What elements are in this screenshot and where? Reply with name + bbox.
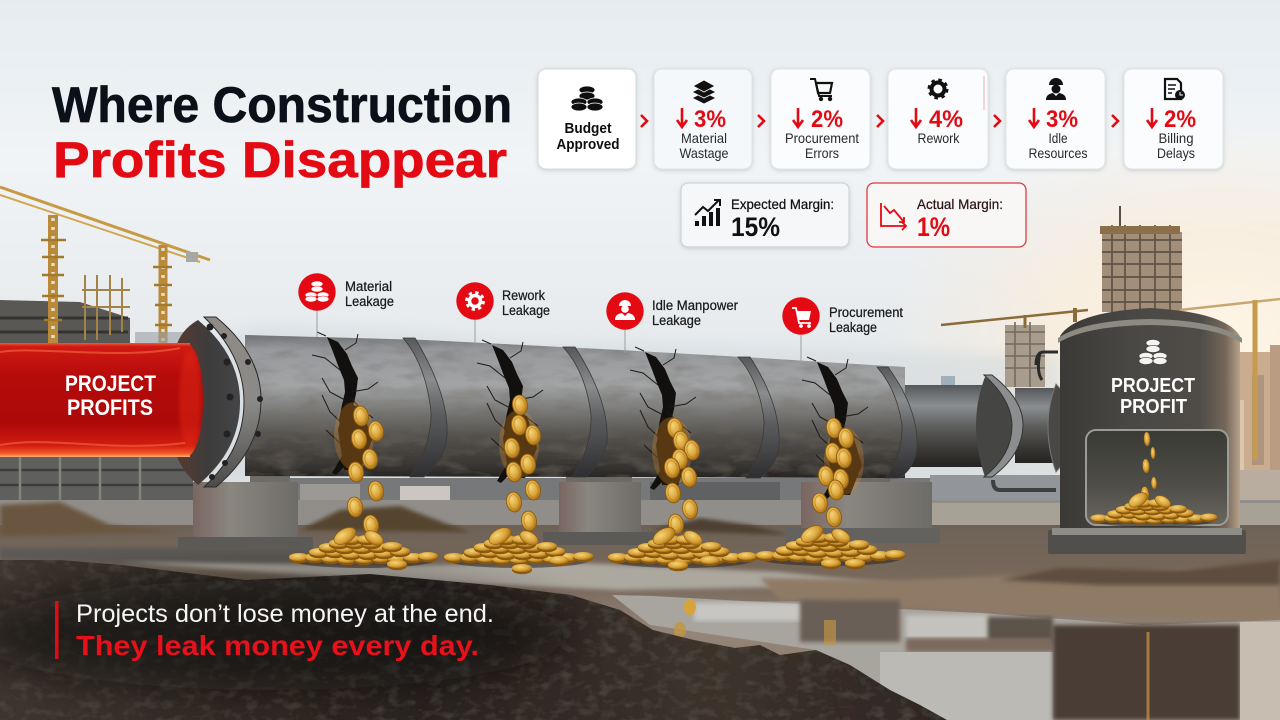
label: project profits: PROJECT: [65, 371, 156, 396]
callout: material leakage: Leakage: [345, 294, 394, 309]
card: idle resources: 3%: [1046, 106, 1078, 133]
foreground soil mound: [0, 560, 947, 720]
pipe bands: [403, 338, 917, 478]
card: billing delays: [1124, 69, 1223, 169]
closing message: They leak money every day.: [76, 630, 479, 661]
margin card: actual: [867, 183, 1026, 247]
closing message: Projects don’t lose money at the end.: [76, 600, 494, 628]
background: site structures behind pipe: [0, 457, 1280, 534]
metal pipeline: [175, 317, 1076, 500]
label: project profits: [65, 371, 156, 420]
margin card: expected: Expected Margin:: [731, 196, 834, 212]
card: material wastage: [654, 69, 752, 169]
callout: idle manpower leakage: [606, 292, 738, 353]
icon: cart: [810, 79, 832, 101]
card: procurement errors: [771, 69, 870, 169]
narrow pipe section: [905, 385, 985, 467]
title: [52, 77, 512, 188]
card: idle resources: [1006, 69, 1105, 169]
icon: rising chart: [695, 200, 720, 226]
icon: gear: [929, 80, 947, 98]
background: left crane and unfinished building: [0, 187, 210, 345]
card: rework: 4%: [929, 106, 963, 133]
closing message: [55, 600, 494, 661]
label: project profit: PROFIT: [1120, 395, 1187, 418]
coins inside tank: [1090, 431, 1217, 527]
card: idle resources: Idle: [1048, 130, 1068, 146]
icon: coin stack: [1139, 339, 1167, 365]
card: material wastage: 3%: [694, 106, 726, 133]
callout: idle manpower leakage: Idle Manpower: [652, 298, 738, 313]
card: billing delays: Billing: [1158, 130, 1194, 146]
card: budget approved: Approved: [556, 137, 620, 153]
card: billing delays: 2%: [1164, 106, 1196, 133]
cracks: [312, 332, 868, 500]
callout: material leakage: [298, 273, 394, 337]
main pipe body: [245, 335, 905, 478]
icon: invoice and clock: [1165, 79, 1185, 100]
coin piles on ground: [289, 522, 905, 574]
icon: cart: [792, 308, 811, 328]
pipe fittings by tank: [993, 352, 1058, 490]
label: project profit: [1111, 374, 1195, 418]
tank window: [1086, 430, 1228, 525]
title: Where Construction: [52, 77, 512, 133]
process flow cards: [538, 69, 1223, 169]
callout: idle manpower leakage: Leakage: [652, 313, 701, 328]
margin card: expected: [681, 183, 849, 247]
label: project profit: PROJECT: [1111, 374, 1195, 397]
arrows between cards: [641, 115, 1118, 127]
card: idle resources: Resources: [1028, 145, 1088, 161]
card: billing delays: Delays: [1157, 145, 1195, 161]
icon: gear: [466, 292, 484, 310]
callout: material leakage: Material: [345, 279, 392, 294]
icon: stacked layers: [692, 80, 716, 104]
callout: procurement leakage: Leakage: [829, 320, 877, 335]
coins: material leak: [346, 405, 385, 536]
icon: coins: [571, 86, 603, 111]
callout: rework leakage: Rework: [502, 288, 545, 303]
coins: rework leak: [503, 394, 542, 532]
card: rework: Rework: [918, 130, 960, 146]
callout: rework leakage: Leakage: [502, 303, 550, 318]
card: material wastage: Material: [681, 130, 727, 146]
coins: procurement leak: [811, 417, 855, 528]
card: budget approved: [538, 69, 636, 169]
leakage callouts: [298, 273, 903, 362]
card: budget approved: Budget: [564, 121, 612, 137]
falling coins: [346, 394, 855, 536]
margin card: expected: 15%: [731, 212, 780, 242]
callout: rework leakage: [456, 282, 550, 345]
coins: idle manpower leak: [663, 417, 701, 535]
card: rework: [888, 69, 988, 169]
card: material wastage: Wastage: [680, 145, 729, 161]
margin card: actual: Actual Margin:: [917, 196, 1003, 212]
outlet flange: [976, 375, 1076, 477]
callout: procurement leakage: [782, 297, 903, 362]
margin card: actual: 1%: [917, 212, 950, 242]
card: procurement errors: 2%: [811, 106, 843, 133]
background: distant city and scaffolded towers: [190, 206, 1280, 480]
storage tank: project profit: [1048, 308, 1246, 554]
background: right cranes: [941, 299, 1280, 460]
red flow: project profits: [0, 343, 203, 457]
large inlet flange: [175, 317, 263, 487]
icon: worker: [615, 300, 635, 320]
icon: falling chart: [881, 203, 906, 230]
callout: procurement leakage: Procurement: [829, 305, 903, 320]
icon: worker: [1046, 78, 1066, 100]
pipe supports: [178, 466, 940, 550]
background: sky: [0, 0, 1280, 560]
ground: [0, 502, 1280, 720]
card: procurement errors: Errors: [805, 145, 839, 161]
label: project profits: PROFITS: [67, 395, 153, 420]
puddle with reflections: [612, 595, 1280, 720]
icon: coins: [305, 281, 329, 302]
card: procurement errors: Procurement: [785, 130, 859, 146]
title: Profits Disappear: [53, 132, 507, 188]
